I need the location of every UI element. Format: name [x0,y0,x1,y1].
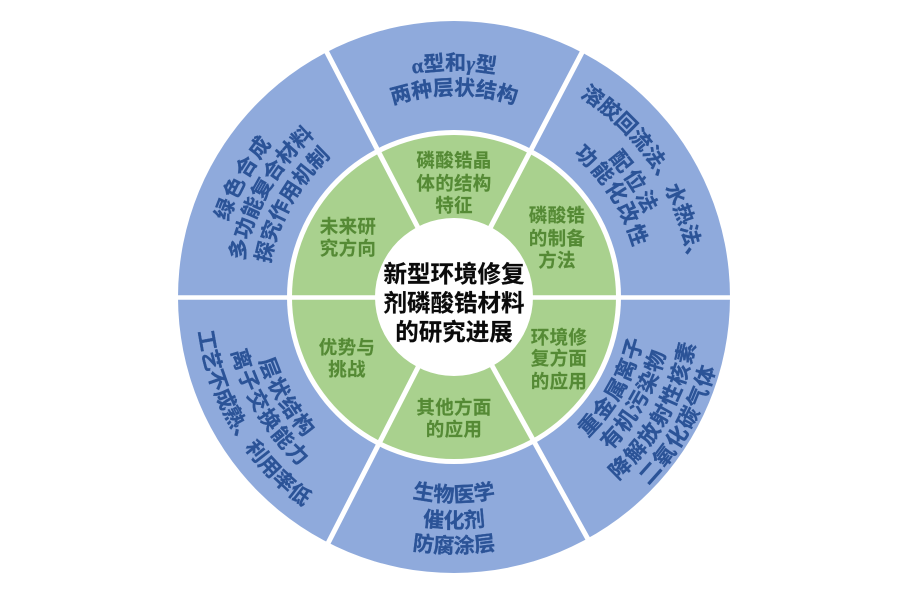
blue panel: layered structure: α型和γ型 [412,52,496,75]
blue panel: other applications [413,481,494,555]
green panel: preparation methods [529,205,585,271]
green panel: crystal structure [416,150,492,216]
green panel: future directions: 究方向 [320,238,376,259]
green panel: advantages and challenges: 优势与 [319,337,375,358]
blue panel: remediation targets: 重金属离子 [576,338,642,438]
green panel: other applications: 的应用 [426,419,482,440]
blue panel: synthesis methods: 配位法 [608,148,658,214]
blue panel: future research: 探究作用机制 [253,144,330,263]
green panel: future directions: 未来研 [320,216,376,237]
green panel: other applications: 其他方面 [416,397,492,418]
blue panel: advantages and challenges: 离子交换能力 [230,348,308,465]
blue panel: other applications: 生物医学 [413,481,494,504]
blue panel: synthesis methods: 溶胶回流法、水热法、 [580,83,702,255]
blue panel: future research: 绿色合成 [212,135,272,222]
green panel: preparation methods: 的制备 [529,228,585,249]
blue panel: other applications: 催化剂 [424,508,484,530]
green panel: environmental remediation: 环境修 [531,327,587,348]
middle green ring [292,135,616,459]
center white circle [375,218,533,376]
green panel: preparation methods: 磷酸锆 [529,205,585,226]
outer blue ring [178,21,730,573]
green panel: environmental remediation: 复方面 [531,348,587,369]
green panel: other applications [416,397,492,440]
green panel: advantages and challenges: 挑战 [328,359,366,380]
green panel: environmental remediation: 的应用 [531,371,587,392]
green panel: crystal structure: 特征 [435,195,473,216]
blue panel: synthesis methods: 功能化改性 [576,143,649,247]
center title [384,261,524,345]
center title: 剂磷酸锆材料 [384,290,524,316]
center title: 新型环境修复 [384,261,524,287]
blue panel: layered structure [389,52,518,106]
green panel: preparation methods: 方法 [538,250,576,271]
green panel: crystal structure: 磷酸锆晶 [416,150,492,171]
green panel: future directions [320,216,376,259]
blue panel: remediation targets [576,338,716,486]
radial diagram rings [165,21,745,573]
green panel: advantages and challenges [319,337,375,380]
blue panel: advantages and challenges: 工艺不成熟、利用率低 [198,330,312,507]
center title: 的研究进展 [395,319,513,345]
blue panel: other applications: 防腐涂层 [413,533,494,555]
green panel: environmental remediation [531,327,587,392]
blue panel: advantages and challenges: 层状结构 [258,356,316,436]
blue panel: remediation targets: 降解放射性核素 [606,342,697,482]
green panel: crystal structure: 体的结构 [416,173,492,194]
blue panel: remediation targets: 有机污染物 [599,349,666,448]
blue panel: future research: 多功能复合材料 [228,124,314,260]
blue panel: layered structure: 两种层状结构 [389,77,518,106]
blue panel: remediation targets: 二氧化碳气体 [639,364,716,486]
